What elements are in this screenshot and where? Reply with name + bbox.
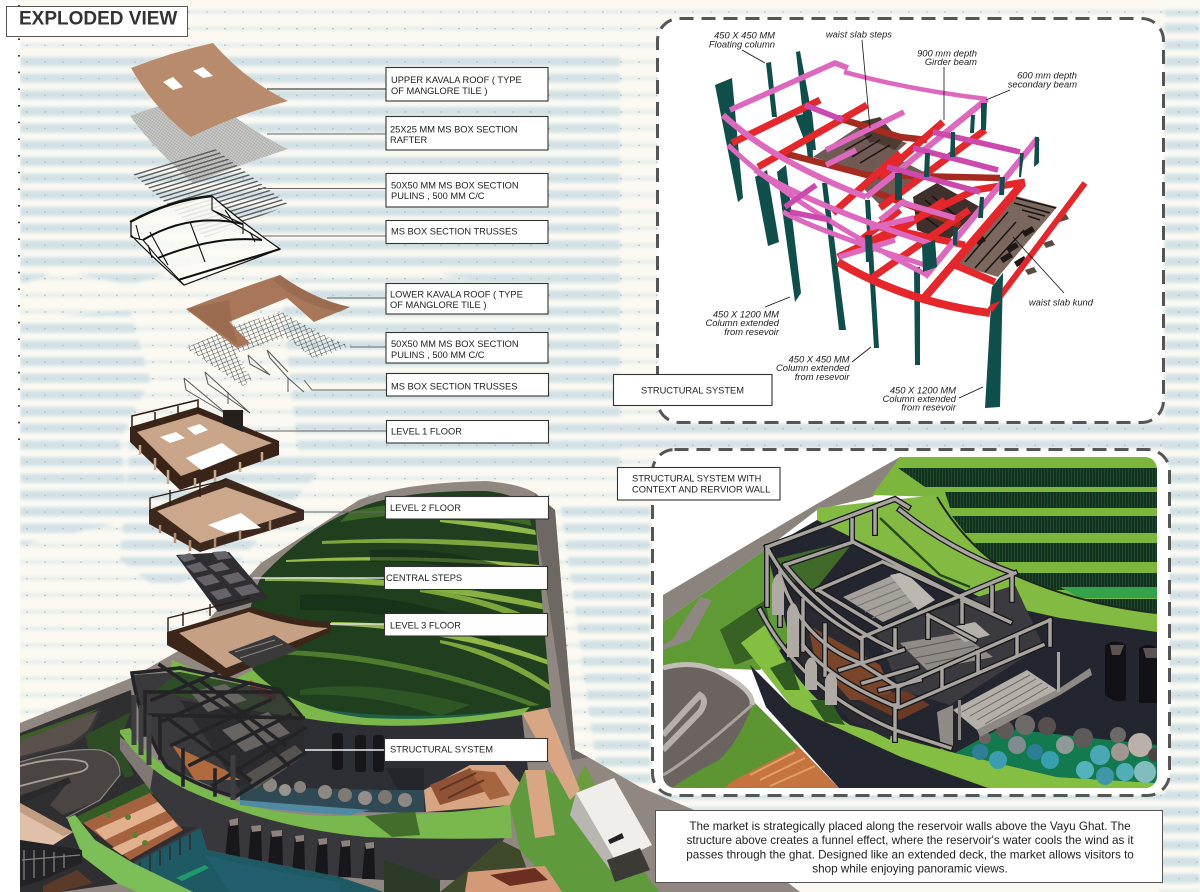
rocks — [240, 778, 424, 815]
terraced hill — [248, 491, 551, 724]
green ground and seats — [672, 700, 799, 788]
label: lower trusses — [386, 374, 548, 396]
annotation: column left: Column extended — [706, 317, 780, 328]
level 1 floor — [130, 400, 279, 490]
village roofs — [384, 840, 562, 892]
label: structural system panel — [614, 374, 772, 406]
pink beams — [723, 63, 1038, 277]
leader lines — [253, 89, 386, 750]
dark red girders — [783, 118, 1000, 225]
terraces — [872, 457, 1157, 640]
reservoir water — [133, 827, 384, 892]
annotation: girder beam: 900 mm depth — [917, 48, 977, 58]
label: purlins — [386, 174, 548, 207]
annotation: column right — [882, 384, 957, 412]
lower purlin grid — [186, 312, 350, 386]
annotation: column centre: Column extended — [776, 362, 850, 373]
dark reservoir wall — [741, 520, 1157, 788]
label: structural system — [384, 738, 548, 762]
waist slabs — [813, 117, 1057, 277]
short teal columns — [865, 103, 1039, 305]
label: lower purlins: PULINS , 500 MM C/C — [391, 350, 485, 360]
central stairs — [843, 573, 916, 622]
lower kavala roof — [186, 275, 350, 348]
description text box: The market is strategically placed along the reservoir walls above the Vayu Ghat. The — [689, 820, 1131, 833]
annotation: column left — [706, 308, 780, 337]
upper green terrace — [170, 660, 530, 728]
site model: reservoir, hill and market — [20, 481, 800, 892]
title box: EXPLODED VIEW — [19, 8, 177, 30]
annotation: floating column: Floating column — [709, 38, 775, 50]
green ramp — [67, 815, 193, 892]
label: central steps — [384, 566, 548, 590]
label: upper kavala roof: UPPER KAVALA ROOF ( TYPE — [391, 75, 522, 85]
description text box — [656, 810, 1162, 882]
label: level 3 floor — [384, 614, 548, 636]
upper green lawn — [817, 496, 1148, 613]
label: context panel — [618, 468, 780, 500]
orange door — [250, 680, 277, 701]
annotation: secondary beam: 600 mm depth — [1017, 70, 1077, 80]
annotation: floating column: 450 X 450 MM — [714, 30, 775, 40]
label: rafter: 25X25 MM MS BOX SECTION — [390, 124, 518, 134]
wall window slots — [332, 733, 384, 772]
grey outer wall — [663, 457, 925, 622]
label: level 1 floor: LEVEL 1 FLOOR — [391, 426, 462, 436]
label: trusses: MS BOX SECTION TRUSSES — [391, 226, 517, 236]
label: purlins: PULINS , 500 MM C/C — [391, 191, 485, 201]
label: level 1 floor — [386, 420, 548, 443]
label: trusses — [386, 220, 548, 244]
annotation: secondary beam: secondary beam — [1008, 78, 1077, 90]
left green lawn — [663, 549, 790, 670]
label: level 2 floor: LEVEL 2 FLOOR — [390, 503, 461, 513]
label: level 2 floor — [386, 496, 548, 519]
amphitheatre seating — [83, 793, 183, 860]
white building — [570, 778, 652, 882]
left land and switchback path — [20, 690, 200, 892]
purlin lines — [132, 148, 289, 238]
annotation: column left: 450 X 1200 MM — [713, 308, 779, 320]
rocks — [972, 715, 1162, 785]
red beams — [732, 100, 1085, 313]
tall teal columns — [715, 51, 1003, 408]
label: context panel: STRUCTURAL SYSTEM WITH — [632, 474, 761, 484]
lower green promenade — [120, 728, 512, 839]
rafter mesh — [130, 98, 288, 183]
label: upper kavala roof — [386, 68, 548, 101]
label: upper kavala roof: OF MANGLORE TILE ) — [391, 86, 487, 96]
under-frame floor — [870, 730, 891, 740]
right green ground — [510, 770, 660, 892]
annotation: column right: 450 X 1200 MM — [890, 384, 956, 396]
annotation: column centre: 450 X 450 MM — [789, 354, 850, 364]
arched window slots — [1105, 642, 1157, 703]
arches — [772, 574, 837, 705]
description text box: structure above creates a funnel effect, where the reservoir's water cools the wind as it — [686, 834, 1134, 847]
hut — [20, 803, 93, 892]
label: rafter — [386, 116, 548, 150]
small trusses — [184, 350, 304, 415]
annotation: floating column — [709, 30, 775, 50]
level 2 floor — [149, 478, 304, 552]
lower arched slots — [225, 818, 375, 879]
roof trusses — [130, 196, 280, 285]
exploded roof and floor layers — [130, 43, 350, 678]
label: context panel: CONTEXT AND RERVIOR WALL — [632, 484, 770, 494]
panel: structural system — [658, 18, 1164, 422]
label: lower kavala roof — [386, 284, 548, 314]
label: lower purlins — [386, 332, 548, 363]
annotation: girder beam: Girder beam — [925, 56, 977, 67]
structural system frame, dark — [132, 665, 305, 800]
lower wall — [150, 770, 505, 880]
peach walkways — [522, 708, 580, 838]
central steps — [176, 551, 268, 612]
annotation: secondary beam — [1008, 70, 1077, 90]
annotation: waist slab kund: waist slab kund — [1029, 296, 1094, 308]
label: purlins: 50X50 MM MS BOX SECTION — [391, 180, 519, 190]
label: rafter: RAFTER — [390, 135, 427, 145]
label: level 3 floor: LEVEL 3 FLOOR — [390, 620, 461, 630]
concrete frame — [760, 499, 1050, 748]
upper kavala roof — [131, 43, 288, 137]
annotation: girder beam — [917, 48, 977, 67]
panel: structural system with context — [652, 450, 1170, 796]
label: lower kavala roof: OF MANGLORE TILE ) — [390, 300, 486, 310]
label: lower kavala roof: LOWER KAVALA ROOF ( TYPE — [390, 290, 523, 300]
annotation: column right: Column extended — [882, 393, 957, 404]
dark wedge — [750, 665, 988, 788]
description text box: shop while enjoying panoramic views. — [812, 862, 1008, 876]
context render — [663, 457, 1162, 788]
water — [955, 728, 1157, 783]
annotation: column centre: from resevoir — [795, 371, 850, 382]
stepped deck — [937, 652, 1092, 750]
annotation: column left: from resevoir — [724, 326, 780, 337]
grey switchback — [663, 664, 752, 788]
slab stair lines — [845, 135, 1056, 272]
market seating on the right — [386, 765, 530, 812]
level 3 floor — [167, 598, 331, 678]
annotation: column right: from resevoir — [901, 402, 957, 412]
label: structural system panel: STRUCTURAL SYSTEM — [641, 386, 744, 396]
description text box: passes through the ghat. Designed like an extended deck, the market allows visitors to — [686, 848, 1134, 862]
annotation: waist slab steps: waist slab steps — [826, 28, 892, 40]
reservoir outer wall — [20, 481, 800, 892]
green strip — [741, 625, 1157, 788]
annotation: column centre — [776, 354, 850, 382]
label: lower purlins: 50X50 MM MS BOX SECTION — [391, 339, 519, 349]
label: central steps: CENTRAL STEPS — [386, 573, 462, 583]
dark reservoir wall — [180, 700, 528, 812]
annotation leaders — [742, 40, 1064, 398]
label: lower trusses: MS BOX SECTION TRUSSES — [391, 382, 517, 392]
label: structural system: STRUCTURAL SYSTEM — [390, 744, 493, 754]
title box — [6, 6, 188, 36]
